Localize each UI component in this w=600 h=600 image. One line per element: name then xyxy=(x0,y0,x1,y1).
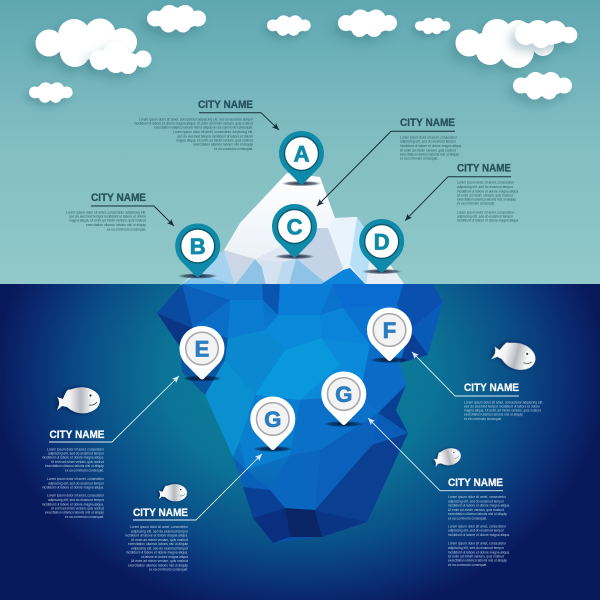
iceberg below water xyxy=(157,284,443,543)
heading: D: CITY NAME xyxy=(457,162,511,174)
text block: D: adipiscing elit, sed do eiusmod tempor xyxy=(457,215,514,219)
text block: B xyxy=(66,210,146,231)
text block: A xyxy=(134,117,254,151)
text block: G left: ex ea commodo consequat. xyxy=(149,568,188,572)
text block: G right: Lorem ipsum dolor sit amet, consectetur xyxy=(448,542,507,546)
text block: D: Lorem ipsum dolor sit amet, consectetur xyxy=(457,210,515,214)
arrow: A xyxy=(199,113,279,130)
pin: A xyxy=(279,131,324,186)
text block: G right: adipiscing elit, sed do eiusmod tempor xyxy=(448,499,505,503)
heading: F: CITY NAME xyxy=(464,382,519,394)
cloud: large top right xyxy=(456,19,554,68)
text block: C: Lorem ipsum dolor sit amet, consectetur xyxy=(400,135,458,139)
text block: E: Lorem ipsum dolor sit amet, consectetur xyxy=(47,447,105,451)
pin: G centre xyxy=(250,396,295,452)
cloud: top centre right xyxy=(338,10,397,37)
arrow: B xyxy=(91,206,174,226)
text block: G right xyxy=(448,495,510,567)
icon: whale left xyxy=(57,387,100,413)
text block: C xyxy=(400,135,462,161)
text block: E: Lorem ipsum dolor sit amet, consectetur xyxy=(47,494,105,498)
heading: G left: CITY NAME xyxy=(133,507,188,519)
callout: C xyxy=(317,117,462,206)
text block: G left xyxy=(125,525,189,572)
text block: G right: incididunt ut labore et dolore magna aliqua. xyxy=(448,504,510,508)
text block: E: adipiscing elit, sed do eiusmod tempor xyxy=(48,498,105,502)
pin: C xyxy=(272,204,317,259)
text block: A: exercitation ullamco laboris nisi ut aliquip ex ea commodo consequat. xyxy=(154,126,253,130)
text block: E: exercitation ullamco laboris nisi ut aliquip xyxy=(45,464,104,468)
text block: G right: incididunt ut labore et dolore magna aliqua. xyxy=(448,550,510,554)
icon: whale lower right xyxy=(432,446,463,469)
heading: B: CITY NAME xyxy=(91,192,146,204)
arrow: G right xyxy=(368,418,503,491)
text block: G right: exercitation ullamco laboris nisi ut aliquip xyxy=(448,559,507,563)
text block: E: incididunt ut labore et dolore magna aliqua. xyxy=(42,502,104,506)
text block: G right: ex ea commodo consequat. xyxy=(448,563,487,567)
text block: E: exercitation ullamco laboris nisi ut aliquip xyxy=(45,511,104,515)
text block: C: incididunt ut labore et dolore magna aliqua. xyxy=(400,144,462,148)
pin: D: D xyxy=(374,230,390,254)
cloud: small left xyxy=(29,82,73,103)
text block: D: Lorem ipsum dolor sit amet, consectetur xyxy=(457,181,515,185)
text block: G left: exercitation ullamco laboris nisi ut aliquip xyxy=(128,563,188,567)
text block: G left: incididunt ut labore et dolore magna aliqua. xyxy=(126,551,188,555)
text block: B: sed do eiusmod tempor incididunt ut labore et dolore xyxy=(69,215,146,219)
text block: D: adipiscing elit, sed do eiusmod tempor xyxy=(457,185,514,189)
text block: G left: adipiscing elit, sed do eiusmod tempor xyxy=(131,529,189,533)
text block: G right: Lorem ipsum dolor sit amet, consectetur xyxy=(448,495,507,499)
text block: G left: Ut enim ad minim veniam, quis nostrud xyxy=(131,559,188,563)
text block: E: Ut enim ad minim veniam, quis nostrud xyxy=(51,460,104,464)
cloud: overlapping top left xyxy=(90,42,152,74)
cloud: lower right xyxy=(513,72,572,100)
heading: A: CITY NAME xyxy=(198,99,253,111)
text block: E: ex ea commodo consequat. xyxy=(65,515,104,519)
text block: G right: adipiscing elit, sed do eiusmod tempor xyxy=(448,546,505,550)
callout: G right xyxy=(368,418,510,567)
text block: G right: Lorem ipsum dolor sit amet, consectetur xyxy=(448,525,507,529)
text block: G right: exercitation ullamco laboris nisi ut aliquip xyxy=(448,512,507,516)
text block: A: exercitation ullamco laboris nisi ut aliquip xyxy=(193,143,253,147)
text block: E: adipiscing elit, sed do eiusmod tempor xyxy=(48,452,105,456)
text block: C: adipiscing elit, sed do eiusmod tempor xyxy=(400,140,457,144)
text block: A: magna aliqua. Ut enim ad minim veniam, quis nostrud xyxy=(176,139,253,143)
callout: B xyxy=(66,192,174,231)
text block: A: Lorem ipsum dolor sit amet, consectetur adipiscing elit, sed do eiusmod tempor xyxy=(139,117,254,121)
arrow: C xyxy=(317,131,455,206)
pin: E: E xyxy=(195,336,209,362)
text block: A: sed do eiusmod tempor incididunt ut labore et dolore xyxy=(177,134,253,138)
callout: G left xyxy=(125,454,262,572)
text block: B: magna aliqua. Ut enim ad minim veniam, quis nostrud xyxy=(69,219,146,223)
text block: F: Lorem ipsum dolor sit amet, consectetur adipiscing elit, xyxy=(464,400,543,404)
pin: D xyxy=(359,219,404,274)
text block: G left: Lorem ipsum dolor sit amet, consectetur xyxy=(130,525,189,529)
text block: F: exercitation ullamco laboris nisi ut aliquip xyxy=(464,413,523,417)
text block: B: Lorem ipsum dolor sit amet, consectetur adipiscing elit, xyxy=(66,210,146,214)
text block: D: incididunt ut labore et dolore magna aliqua. xyxy=(457,189,519,193)
icon: whale lower left xyxy=(159,484,187,501)
heading: E: CITY NAME xyxy=(50,429,105,441)
text block: G right: Ut enim ad minim veniam, quis nostrud xyxy=(448,508,504,512)
callout: E xyxy=(42,376,179,519)
pin: G right: G xyxy=(335,382,352,407)
cloud: tiny top right xyxy=(415,18,450,34)
text block: E: Ut enim ad minim veniam, quis nostrud xyxy=(51,507,104,511)
text block: G left: exercitation ullamco laboris nisi ut aliquip xyxy=(128,542,188,546)
callout: D xyxy=(405,162,519,223)
text block: F: magna aliqua. Ut enim ad minim veniam, quis nostrud xyxy=(464,409,541,413)
text block: A: Lorem ipsum dolor sit amet, consectetur adipiscing elit, xyxy=(173,130,253,134)
text block: F: sed do eiusmod tempor incididunt ut labore et dolore xyxy=(464,404,540,408)
pin: B: B xyxy=(190,234,206,259)
cloud: top centre xyxy=(267,15,311,36)
arrow: D xyxy=(405,177,511,221)
iceberg above water xyxy=(180,173,405,285)
heading: C: CITY NAME xyxy=(400,117,455,129)
text block: A: ex ea commodo consequat. xyxy=(214,147,253,151)
text block: B: ex ea commodo consequat. xyxy=(107,227,146,231)
text block: E: incididunt ut labore et dolore magna aliqua. xyxy=(42,485,104,489)
pin: E xyxy=(180,326,224,382)
text block: G left: adipiscing elit, sed do eiusmod tempor xyxy=(131,546,189,550)
text block: C: Ut enim ad minim veniam, quis nostrud xyxy=(400,148,456,152)
pin: B xyxy=(175,223,220,279)
pin: G centre: G xyxy=(264,407,281,432)
text block: G left: incididunt ut labore et dolore magna aliqua. xyxy=(125,534,188,538)
pin: F: F xyxy=(383,318,396,343)
text block: E: incididunt ut labore et dolore magna aliqua. xyxy=(42,456,104,460)
text block: E: Lorem ipsum dolor sit amet, consectetur xyxy=(47,477,105,481)
text block: D: ex ea commodo consequat. xyxy=(457,202,495,206)
text block: D: incididunt ut labore et dolore magna aliqua. xyxy=(457,219,519,223)
text block: G right: Ut enim ad minim veniam, quis nostrud xyxy=(448,554,504,558)
arrow: F xyxy=(412,352,519,396)
text block: D: Ut enim ad minim veniam, quis nostrud xyxy=(457,193,513,197)
callout: F xyxy=(412,352,543,421)
text block: C: exercitation ullamco laboris nisi ut aliquip xyxy=(400,152,459,156)
icon: whale right xyxy=(490,337,539,374)
text block: F xyxy=(464,400,543,421)
text block: A: incididunt ut labore et dolore magna aliqua. Ut enim ad minim veniam, quis nostrud xyxy=(134,122,253,126)
sky background xyxy=(0,0,600,284)
cloud: large top left xyxy=(36,18,137,67)
text block: D: exercitation ullamco laboris nisi ut aliquip xyxy=(457,198,516,202)
text block: G right: adipiscing elit, sed do eiusmod tempor xyxy=(448,529,505,533)
pin: A: A xyxy=(294,142,310,166)
pin: F xyxy=(367,307,412,363)
heading: G right: CITY NAME xyxy=(448,477,503,489)
text block: G right: incididunt ut labore et dolore magna aliqua. xyxy=(448,533,510,537)
cloud: top second xyxy=(147,5,206,32)
text block: F: ex ea commodo consequat. xyxy=(464,417,502,421)
text block: E xyxy=(42,447,105,519)
text block: E: adipiscing elit, sed do eiusmod tempor xyxy=(48,481,105,485)
arrow: E xyxy=(49,376,179,442)
cloud: overlapping top right xyxy=(515,20,577,48)
text block: G left: Ut enim ad minim veniam, quis nostrud xyxy=(131,538,188,542)
text block: G left: ut labore et dolore magna aliqua xyxy=(141,555,189,559)
text block: G right: ex ea commodo consequat. xyxy=(448,516,487,520)
text block: B: exercitation ullamco laboris nisi ut aliquip xyxy=(86,223,146,227)
pin: C: C xyxy=(287,214,303,240)
arrow: G left xyxy=(133,454,262,520)
pin: G right xyxy=(321,371,366,427)
text block: D xyxy=(457,181,519,223)
callout: A xyxy=(134,99,279,151)
text block: C: ex ea commodo consequat. xyxy=(400,157,438,161)
text block: E: ex ea commodo consequat. xyxy=(65,468,104,472)
sea background xyxy=(0,284,600,600)
